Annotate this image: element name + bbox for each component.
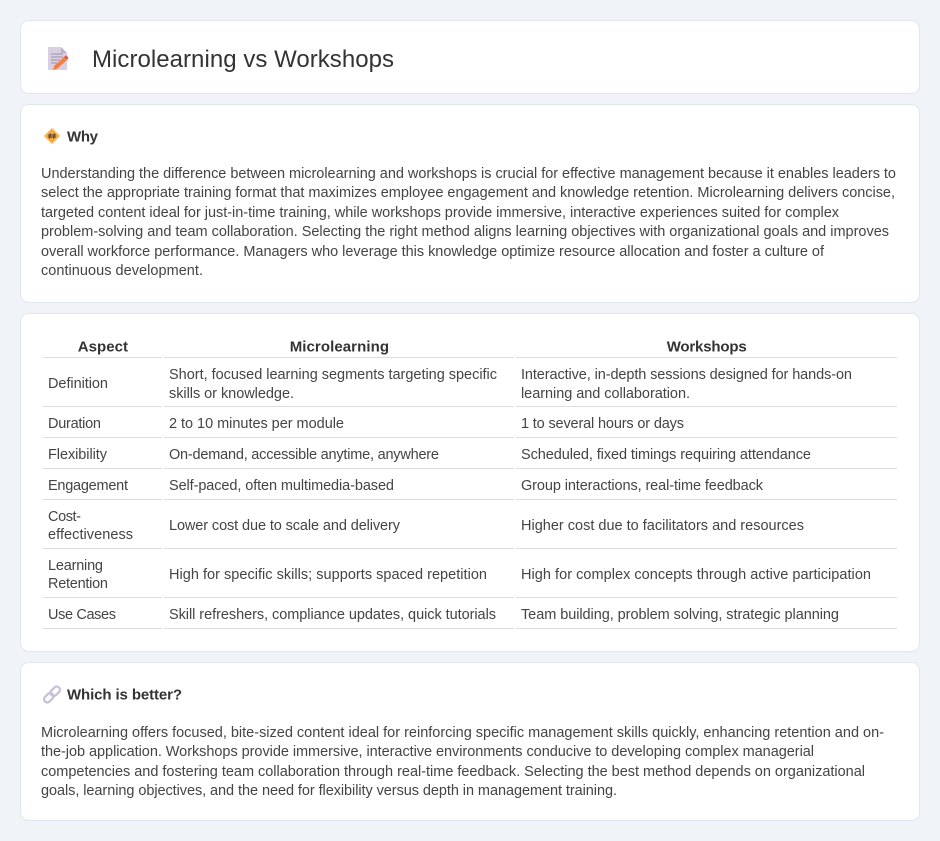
text block: which is better paragraph: goals, learning objectives, and the need for flexibility versus depth in management training. (41, 783, 617, 799)
text block: which is better paragraph: the-job application. Workshops provide immersive, interactive environments conducive to developing complex managerial (41, 744, 814, 760)
text block: why paragraph: continuous development. (41, 263, 203, 279)
panel: title header (20, 20, 920, 94)
row: flexibility: Flexibility (48, 447, 108, 463)
title: Microlearning vs Workshops (92, 46, 394, 73)
row: definition: learning and collaboration. (521, 386, 690, 402)
text block: why paragraph (41, 166, 896, 279)
row: engagement: Group interactions, real-time feedback (521, 478, 764, 494)
row: definition (48, 367, 852, 402)
row: use cases: Use Cases (48, 607, 116, 623)
row: learning retention: High for specific skills; supports spaced repetition (169, 567, 487, 583)
row: cost-effectiveness (48, 509, 804, 543)
table header: Microlearning (290, 338, 389, 356)
row: use cases: Team building, problem solving, strategic planning (521, 607, 839, 623)
row: definition: Short, focused learning segments targeting specific (169, 367, 497, 383)
row: engagement: Self-paced, often multimedia-based (169, 478, 394, 494)
text block: why paragraph: Understanding the difference between microlearning and workshops is crucial for effective management because it enables leaders to (41, 166, 896, 182)
row: cost-effectiveness: Lower cost due to scale and delivery (169, 518, 401, 534)
row: cost-effectiveness: Higher cost due to facilitators and resources (521, 518, 804, 534)
row: cost-effectiveness: effectiveness (48, 527, 133, 543)
row: learning retention: Learning (48, 558, 103, 574)
table header: Aspect (78, 338, 128, 356)
row: duration (48, 416, 684, 432)
row: flexibility: Scheduled, fixed timings requiring attendance (521, 447, 811, 463)
panel: comparison table (20, 314, 920, 652)
row: learning retention: High for complex concepts through active participation (521, 567, 871, 583)
panel: which is better (20, 662, 920, 820)
row: use cases: Skill refreshers, compliance updates, quick tutorials (169, 607, 496, 623)
row: use cases (48, 607, 839, 623)
table header (78, 338, 747, 356)
text block: why paragraph: targeted content ideal for just-in-time training, while workshops provide immersive, interactive experiences suited for complex (41, 205, 840, 221)
icon: warning diamond (44, 128, 60, 144)
row: duration: 1 to several hours or days (521, 416, 684, 432)
icon: memo with pencil (48, 47, 68, 70)
table header: Workshops (667, 338, 747, 356)
row: duration: 2 to 10 minutes per module (169, 416, 344, 432)
row: duration: Duration (48, 416, 101, 432)
text block: why paragraph: problem-solving and team collaboration. Selecting the right method aligns learning objectives with organizational goals and improves (41, 224, 889, 240)
row: learning retention: Retention (48, 576, 108, 592)
row: flexibility (48, 447, 811, 463)
row: engagement: Engagement (48, 478, 128, 494)
row: definition: Interactive, in-depth sessions designed for hands-on (521, 367, 852, 383)
text block: which is better paragraph: competencies and fostering team collaboration through real-time feedback. Selecting the best method depends on organizational (41, 764, 865, 780)
icon: link (43, 685, 61, 704)
text block: why paragraph: select the appropriate training format that maximizes employee engagement and knowledge retention. Microlearning delivers concise, (41, 185, 895, 201)
text block: which is better paragraph: Microlearning offers focused, bite-sized content ideal for reinforcing specific management skills quickly, enhancing retention and on- (41, 725, 884, 741)
row: definition: skills or knowledge. (169, 386, 294, 402)
text block: why paragraph: overall workforce performance. Managers who leverage this knowledge optimize resource allocation and foster a culture of (41, 244, 825, 260)
row: cost-effectiveness: Cost- (48, 509, 81, 525)
row: engagement (48, 478, 764, 494)
heading: why: Why (67, 128, 99, 146)
heading: which is better: Which is better? (67, 686, 182, 704)
panel: why (20, 104, 920, 302)
text block: which is better paragraph (41, 725, 884, 799)
row: definition: Definition (48, 376, 108, 392)
row: flexibility: On-demand, accessible anytime, anywhere (169, 447, 439, 463)
row: learning retention (48, 558, 871, 592)
